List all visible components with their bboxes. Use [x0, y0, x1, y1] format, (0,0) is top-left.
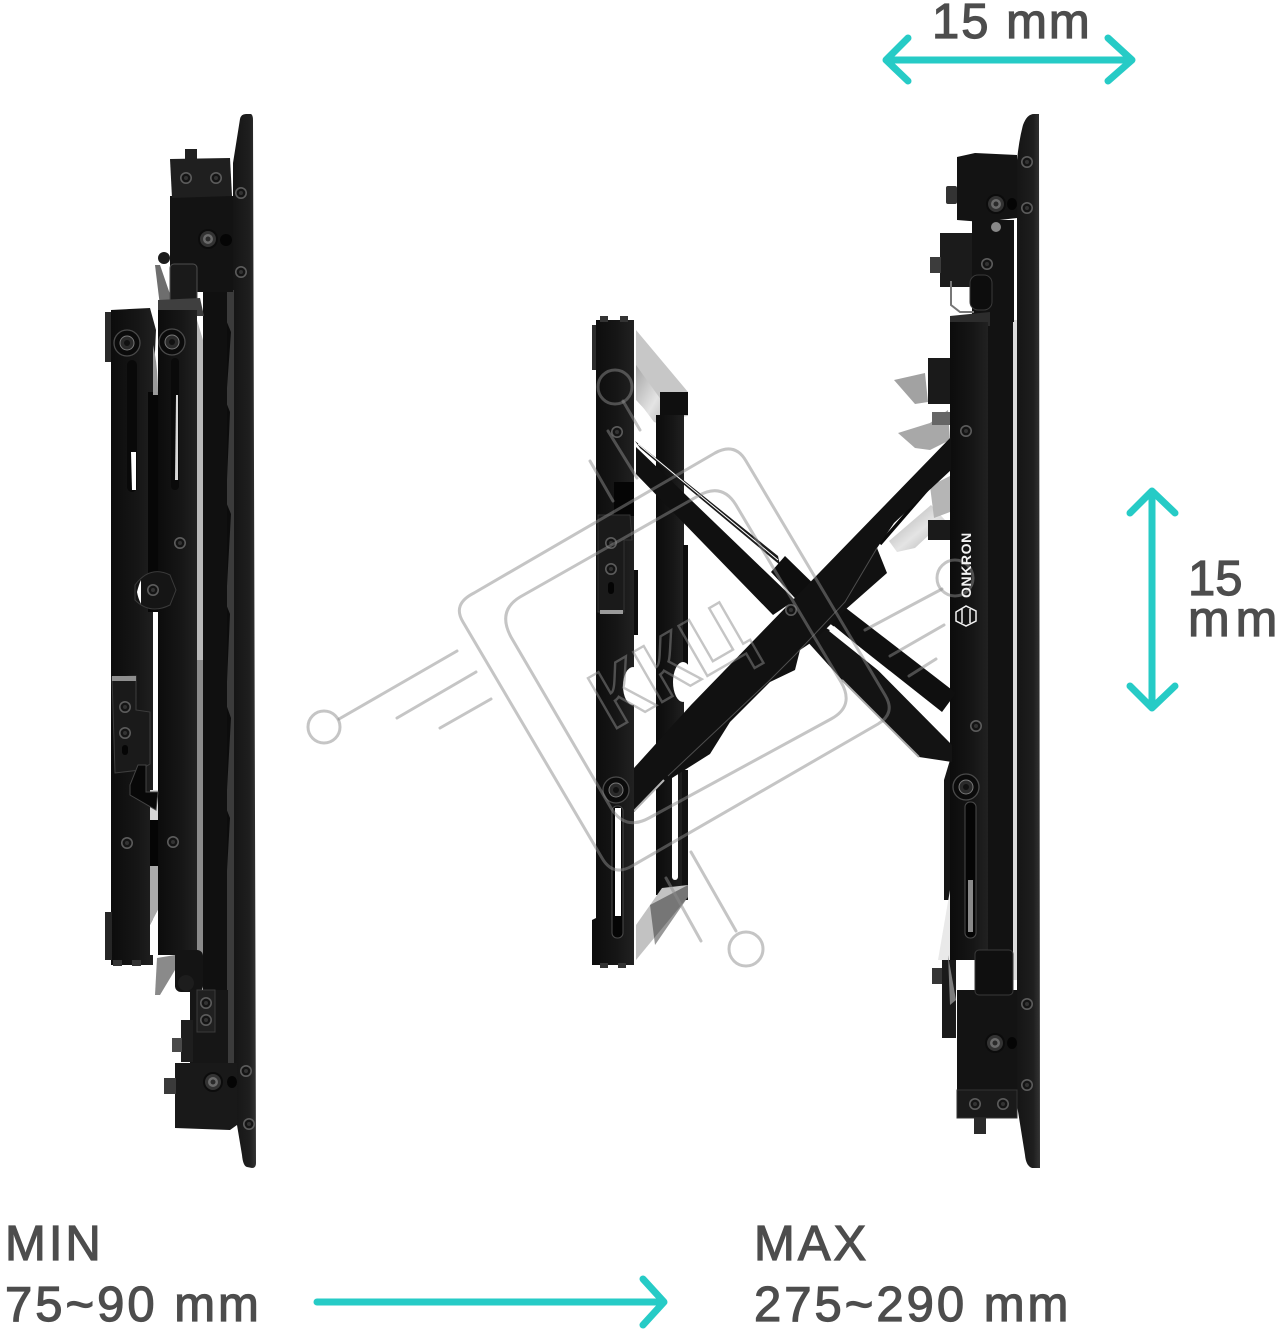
- sliding bracket with screws: [112, 676, 179, 849]
- rear rail: [197, 288, 234, 1068]
- top bracket: [930, 153, 1033, 326]
- lower gap between arms: [150, 790, 158, 955]
- X arm: upper left to lower right: [635, 441, 956, 762]
- brand label: ONKRON: [958, 532, 974, 598]
- label: MAX: 275~290 mm: [754, 1278, 1071, 1332]
- wall plate: [1017, 114, 1040, 1168]
- folding mechanism silver: [880, 476, 950, 552]
- watermark node top: [598, 370, 632, 404]
- watermark node left: [308, 711, 340, 743]
- label: MIN: [5, 1217, 262, 1332]
- top bracket: [170, 149, 247, 292]
- watermark traces right: [865, 589, 944, 676]
- watermark node bottom: [729, 932, 763, 966]
- device: mount extended (MAX position): [592, 114, 1040, 1168]
- wall plate: [233, 114, 256, 1168]
- watermark inner rounded square: [506, 491, 846, 823]
- arrow: horizontal 15 mm: [886, 38, 1132, 81]
- label: MIN: MIN: [5, 1217, 104, 1271]
- watermark traces top: [590, 401, 640, 501]
- bottom bracket: [932, 950, 1033, 1134]
- latch plates: [894, 358, 950, 450]
- bottom latch: [155, 950, 203, 995]
- rear rail: [985, 222, 1017, 1000]
- arrow: vertical 15 mm: [1130, 491, 1175, 708]
- front arm B: [158, 310, 197, 955]
- front arm A: [105, 308, 160, 966]
- rear frame rail: [636, 330, 693, 960]
- label: MAX: [754, 1217, 1071, 1332]
- lower bracket and bolts: [172, 990, 228, 1064]
- label: 15 mm vertical: [1188, 552, 1280, 647]
- brand label: [956, 532, 976, 626]
- watermark letters: ККЦ: [574, 582, 766, 747]
- upper latch tabs: [155, 252, 204, 316]
- watermark node right: [937, 560, 973, 596]
- watermark: circuit stamp: [308, 370, 973, 966]
- brand logo: [956, 606, 976, 626]
- watermark traces left: [339, 651, 491, 728]
- bottom block: [164, 1063, 255, 1130]
- centre pivot: [135, 572, 176, 609]
- X arm: lower left to upper right: [634, 437, 951, 812]
- front frame rail: [592, 316, 643, 968]
- watermark traces bottom: [666, 852, 736, 941]
- arrow: min to max: [317, 1279, 664, 1325]
- device: mount collapsed (MIN position): [105, 114, 256, 1168]
- watermark outer rounded square: [459, 449, 889, 870]
- label: 15 mm vertical: 15: [1188, 552, 1243, 606]
- front rail: [938, 322, 988, 960]
- label: MIN: 75~90 mm: [5, 1278, 262, 1332]
- label: MAX: MAX: [754, 1217, 869, 1271]
